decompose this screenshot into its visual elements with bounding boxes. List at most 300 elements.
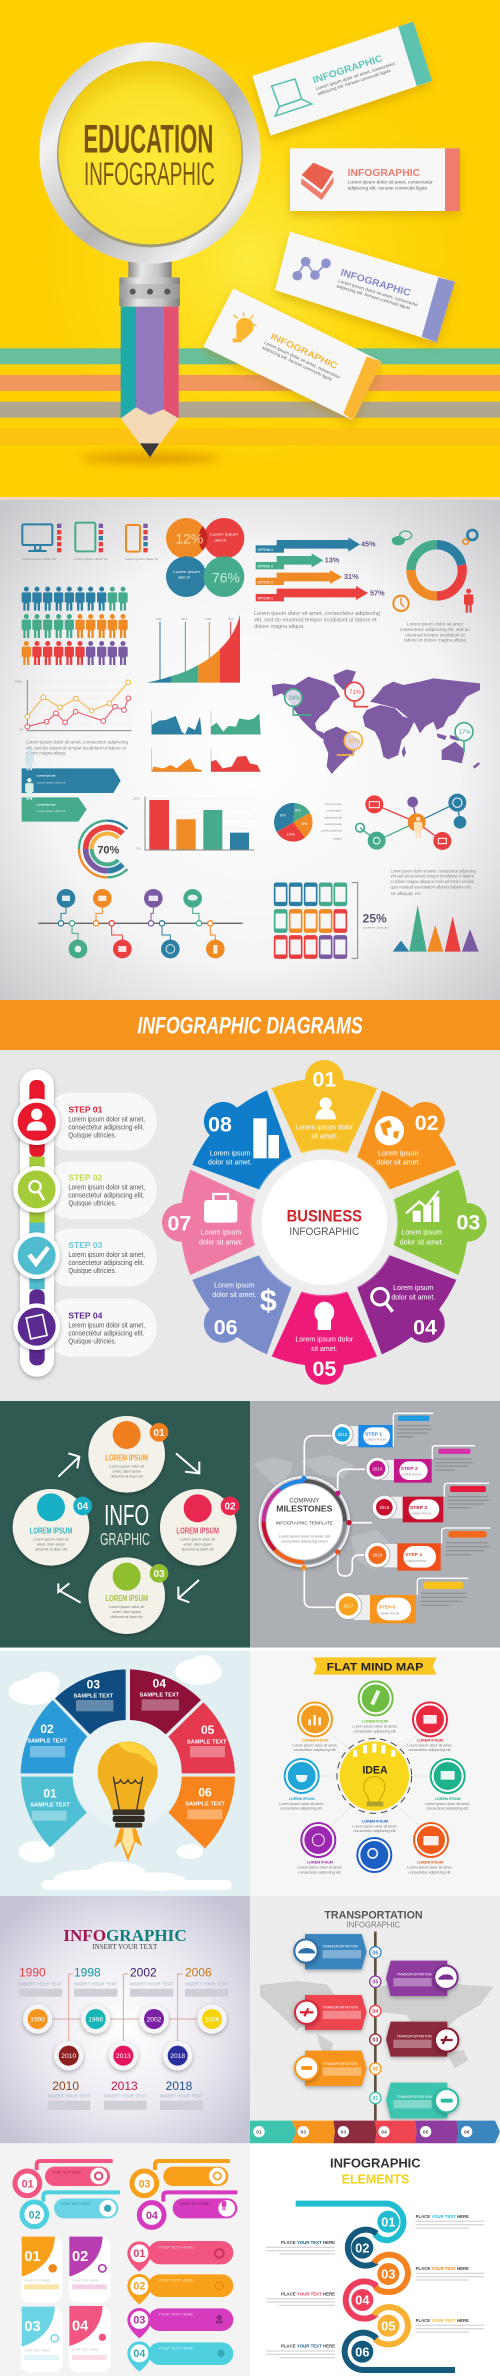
s-curve rings <box>296 2204 455 2370</box>
pin list: YOUR TEXT HERE <box>158 2312 194 2317</box>
milestone row 2016: STEP 4 <box>405 1552 422 1558</box>
corner cards <box>21 2237 111 2372</box>
card: graph <box>275 232 455 342</box>
panel: light bulb rocket arc: SAMPLE TEXT <box>30 1803 70 1809</box>
banner title: FLAT MIND MAP <box>327 1662 424 1674</box>
satellite captions: Lorem ipsum dolor sit amet, <box>407 1866 453 1870</box>
panel: hand-drawn info graphic: amet, diam quam <box>113 1470 141 1474</box>
panel: hand-drawn info graphic: LOREM IPSUM <box>105 1453 148 1463</box>
pin list: 04 <box>133 2348 145 2360</box>
wheel numbers: 07 <box>167 1212 191 1236</box>
panel: timeline 1990 to 2018: 2002 <box>147 2016 162 2023</box>
milestone row 2014 <box>366 1446 475 1483</box>
growth curve chart: 64% <box>205 617 212 621</box>
satellite captions: LOREM IPSUM <box>417 1738 443 1742</box>
card: light bulb: Lorem ipsum dolor sit amet, consectetur <box>263 340 342 380</box>
panel: hand-drawn info graphic: dictumst at diam elit <box>111 1475 143 1479</box>
bottom arrow strip <box>250 2121 500 2143</box>
wheel icons: $ <box>260 1284 277 1318</box>
pin list: YOUR TEXT HERE <box>158 2245 194 2250</box>
card: laptop: INFOGRAPHIC <box>312 53 384 86</box>
chart: eight-segment wheel <box>162 1060 487 1385</box>
satellite captions: LOREM IPSUM <box>289 1797 315 1801</box>
pie chart <box>274 802 343 842</box>
panel: hand-drawn info graphic: amet, diam quam <box>37 1542 65 1546</box>
milestone row 2015 <box>372 1483 489 1522</box>
option arrows: OPTION 2 <box>257 580 273 584</box>
panel: timeline 1990 to 2018: INSERT YOUR TEXT <box>74 1981 117 1986</box>
title: info graphic: GRAPHIC <box>100 1529 150 1549</box>
corner cards: 04 <box>72 2318 89 2334</box>
card: graph: adipiscing elit. Aenean commodo ligula <box>336 283 411 311</box>
pin list: 02 <box>133 2281 145 2293</box>
panel: timeline 1990 to 2018: 2006 <box>205 2016 220 2023</box>
panel: step list <box>13 1069 157 1377</box>
section: infographic elements sheet: eiusmod tempor incididunt ut <box>405 632 465 637</box>
card: laptop: Lorem ipsum dolor sit amet, consectetur <box>315 61 396 91</box>
panel: infographic elements: 02 <box>355 2241 369 2255</box>
section: four panel row one and two <box>0 1401 500 1897</box>
pie chart: Lorem ipsum <box>325 822 343 826</box>
step text: consectetur adipiscing elit. <box>68 1258 144 1267</box>
corner cards: YOUR TEXT HERE <box>24 2348 50 2352</box>
panel: infographic elements: 05 <box>381 2319 395 2333</box>
milestone row 2014: STEP 2 <box>401 1466 418 1472</box>
panel: timeline 1990 to 2018: INSERT YOUR TEXT <box>185 1981 228 1986</box>
section: education infographic hero <box>0 0 500 499</box>
panel: infographic elements: 03 <box>381 2268 395 2282</box>
step text <box>68 1104 145 1345</box>
section: four panel row three and four <box>0 1896 500 2376</box>
wheel captions: dolor sit amet. <box>212 1292 256 1299</box>
bottom arrow strip: 05 <box>423 2130 429 2136</box>
option arrows: 45% <box>361 540 376 549</box>
panel: hand-drawn info graphic: amet, diam quam <box>184 1542 212 1546</box>
pin list: 03 <box>133 2315 145 2327</box>
card: book: INFOGRAPHIC <box>348 168 420 179</box>
milestone row 2016: LOREM IPSUM <box>405 1559 426 1563</box>
milestones title: MILESTONES <box>276 1503 333 1513</box>
card: laptop: adipiscing elit. Aenean commodo ligula <box>317 68 392 96</box>
wheel numbers: 06 <box>214 1315 238 1339</box>
panel: hand-drawn info graphic: Lorem ipsum dolor sit <box>180 1537 215 1541</box>
panel: timeline 1990 to 2018: 2010 <box>61 2053 76 2060</box>
option arrows: 31% <box>344 572 359 581</box>
panel: infographic elements: 04 <box>355 2294 369 2308</box>
text block: Lorem ipsum dolor sit amet, consectetur adipiscing <box>391 868 476 873</box>
milestone row 2017: LOREM IPSUM <box>378 1612 400 1616</box>
text block <box>391 868 476 896</box>
wheel captions: Lorem ipsum <box>210 1150 250 1157</box>
step text: Quisque ultricies. <box>68 1130 116 1139</box>
step icons <box>26 1109 50 1339</box>
panel: timeline 1990 to 2018: INSERT YOUR TEXT <box>104 2093 147 2098</box>
pie chart: 9% <box>295 807 301 812</box>
step text: Lorem ipsum dolor sit amet, <box>68 1320 145 1329</box>
panel: transportation infographic: TRANSPORTATION <box>323 2004 358 2009</box>
wheel captions: Lorem ipsum <box>378 1150 419 1157</box>
line chart <box>15 680 132 756</box>
step text: Quisque ultricies. <box>68 1198 116 1207</box>
transport icon badges <box>294 1939 458 2112</box>
satellite captions: consectetur adipiscing elit. <box>280 1807 323 1811</box>
step circles <box>13 1098 60 1350</box>
wheel captions: dolor sit amet. <box>376 1160 420 1167</box>
panel: light bulb rocket arc: 03 <box>87 1677 100 1691</box>
element captions: PLACE YOUR TEXT HERE <box>281 2240 335 2245</box>
card: laptop <box>252 22 432 136</box>
number nodes <box>370 1947 381 2104</box>
wheel captions: dolor sit amet. <box>208 1160 252 1167</box>
panel: numbered labels collection <box>0 2143 250 2376</box>
line chart: 100% <box>15 680 23 684</box>
panel: flat mind map <box>250 1651 500 1897</box>
satellite captions: Lorem ipsum dolor sit amet, <box>352 1824 398 1828</box>
text block: dolore magna aliqua. <box>254 624 305 630</box>
world map: 17% <box>459 730 471 736</box>
triangle chart <box>393 905 479 952</box>
title: education infographic: EDUCATION <box>83 118 213 162</box>
satellite captions: consectetur adipiscing elit. <box>354 1829 396 1833</box>
pill row 03: 03 <box>139 2178 151 2190</box>
pill row 01: 01 <box>22 2178 34 2190</box>
satellite captions: Lorem ipsum dolor sit amet, <box>279 1802 324 1806</box>
text block <box>254 611 380 630</box>
clouds <box>8 1655 232 1891</box>
title: education infographic <box>83 118 215 192</box>
element captions: PLACE YOUR TEXT HERE <box>281 2344 335 2349</box>
milestone row 2013: STEP 1 <box>365 1432 382 1438</box>
text block: elit sed do eiusmod tempor incididunt ut labore <box>391 874 475 879</box>
panel: infographic elements: 06 <box>355 2345 369 2359</box>
panel: light bulb rocket arc: SAMPLE TEXT <box>185 1802 225 1808</box>
pill row 01: YOUR TEXT HERE <box>52 2170 82 2174</box>
icon: rocket light bulb <box>98 1742 158 1862</box>
satellite captions: LOREM IPSUM <box>435 1797 461 1801</box>
panel: timeline 1990 to 2018: 2006 <box>185 1966 212 1980</box>
panel: timeline 1990 to 2018: 2010 <box>52 2079 79 2093</box>
wheel center label <box>287 1207 362 1238</box>
satellite captions: consectetur adipiscing elit. <box>409 1870 451 1874</box>
elements title: INFOGRAPHIC <box>330 2155 421 2170</box>
bar chart <box>132 796 254 850</box>
panel: timeline 1990 to 2018: 2018 <box>166 2079 193 2093</box>
satellite captions: consectetur adipiscing elit. <box>426 1807 469 1811</box>
panel: hand-drawn info graphic: Lorem ipsum dolor sit <box>109 1465 144 1469</box>
donut chart <box>392 530 477 613</box>
arrow tabs: Lorem ipsum dolor sit <box>37 780 65 784</box>
percent circles: 12% <box>175 531 203 547</box>
panel: transportation infographic: 05 <box>372 1980 378 1986</box>
pin list: 01 <box>133 2248 145 2260</box>
milestones title: Lorem ipsum dolor sit amet, elit <box>279 1535 330 1539</box>
panel: company milestones <box>250 1401 500 1648</box>
step text: consectetur adipiscing elit. <box>68 1190 144 1199</box>
panel: light bulb rocket arc: 01 <box>43 1786 57 1800</box>
pie chart: 8% <box>280 813 286 818</box>
timeline title: INFOGRAPHIC <box>63 1926 187 1945</box>
bottom arrow strip: 06 <box>464 2130 470 2136</box>
card: book: adipiscing elit. Aenean commodo ligula <box>348 186 428 191</box>
panel: light bulb rocket arc: 06 <box>198 1786 212 1800</box>
wheel captions: Lorem ipsum dolor <box>295 1337 354 1344</box>
radial progress 70 percent: 70% <box>97 844 120 856</box>
pie chart: Lorem ipsum <box>325 802 343 806</box>
wheel captions: Lorem ipsum <box>401 1230 442 1237</box>
card: book: Lorem ipsum dolor sit amet, consectetur <box>348 180 433 185</box>
percent circles: Lorem ipsum <box>173 570 200 574</box>
wheel captions: sit amet. <box>311 1346 338 1353</box>
element captions: PLACE YOUR TEXT HERE <box>416 2214 469 2219</box>
wheel captions <box>199 1124 444 1353</box>
arrow tabs <box>22 749 121 822</box>
step text: Quisque ultricies. <box>68 1336 116 1345</box>
panel: timeline 1990 to 2018: 2013 <box>111 2079 138 2093</box>
central idea circle <box>337 1739 412 1813</box>
world map: 24% <box>288 696 301 702</box>
step text: STEP 02 <box>68 1173 103 1183</box>
panel: timeline 1990 to 2018: 2018 <box>170 2053 185 2060</box>
wheel captions: dolor sit amet. <box>391 1295 435 1302</box>
pie chart: adipiscing elit <box>324 815 342 819</box>
transportation title <box>324 1909 423 1929</box>
arrows <box>58 1453 199 1603</box>
card: graph: INFOGRAPHIC <box>339 267 412 299</box>
wheel numbers: 05 <box>312 1357 336 1381</box>
milestone row 2015: STEP 3 <box>410 1505 427 1511</box>
milestones title <box>276 1499 333 1544</box>
milestone row 2015: 2015 <box>380 1505 390 1510</box>
text block: quis nostrud exercitation ullamco laboris nisi <box>391 884 471 889</box>
panel: timeline 1990 to 2018: 1990 <box>19 1966 46 1980</box>
panel: hand-drawn info graphic: dictumst at diam elit <box>111 1615 143 1619</box>
card: light bulb: INFOGRAPHIC <box>269 331 340 371</box>
panel: timeline 1990 to 2018: 1998 <box>74 1966 101 1980</box>
panel: transportation infographic: 06 <box>372 1950 378 1956</box>
text block: ut aliquip ex <box>391 891 422 896</box>
pie chart: 8% <box>302 821 308 826</box>
panel: infographic elements <box>250 2143 500 2376</box>
satellite captions: LOREM IPSUM <box>302 1738 328 1742</box>
panel: light bulb rocket arc: 04 <box>153 1677 166 1691</box>
step text: Quisque ultricies. <box>68 1266 116 1275</box>
milestone row 2013: LOREM IPSUM <box>365 1438 386 1442</box>
percent circles: Lorem ipsum <box>210 533 238 537</box>
phone grid <box>275 883 389 958</box>
network diagram <box>356 794 466 850</box>
corner cards: YOUR TEXT HERE <box>72 2348 98 2352</box>
panel: hand-drawn info graphic: 04 <box>77 1502 89 1513</box>
card: graph: Lorem ipsum dolor sit amet, consectetur <box>338 278 419 308</box>
step text: Lorem ipsum dolor sit amet, <box>68 1182 145 1191</box>
panel: hand-drawn info graphic: LOREM IPSUM <box>176 1525 219 1535</box>
panel: timeline 1990 to 2018: 2013 <box>116 2053 131 2060</box>
wheel captions: dolor sit amet. <box>400 1240 444 1247</box>
satellite captions: consectetur adipiscing elit. <box>294 1748 336 1752</box>
step text: STEP 04 <box>68 1311 103 1321</box>
wheel numbers: 08 <box>208 1112 232 1136</box>
text block: et dolore magna aliqua ut enim ad minim veniam <box>391 879 474 884</box>
milestone row 2013 <box>332 1413 433 1447</box>
pill row 04: YOUR TEXT HERE <box>179 2202 209 2206</box>
coloured stripes <box>0 348 500 445</box>
satellite captions: Lorem ipsum dolor sit amet, <box>407 1743 453 1747</box>
pill row 01 <box>15 2161 113 2196</box>
satellite captions: LOREM IPSUM <box>362 1720 388 1724</box>
bottom arrow strip: 04 <box>381 2130 387 2136</box>
milestone row 2016: 2016 <box>373 1553 383 1558</box>
panel: hand-drawn info graphic: Lorem ipsum dolor sit <box>109 1605 144 1609</box>
step text: consectetur adipiscing elit. <box>68 1328 144 1337</box>
satellite captions: Lorem ipsum dolor sit amet, <box>297 1866 343 1870</box>
arrow tabs: Lorem ipsum <box>37 774 56 778</box>
wheel numbers <box>167 1068 480 1381</box>
milestone row 2017 <box>335 1578 468 1623</box>
corner cards: 03 <box>24 2319 41 2335</box>
step text: Lorem ipsum dolor sit amet, <box>68 1250 145 1259</box>
panel: transportation infographic: TRANSPORTATION <box>397 1972 432 1977</box>
growth curve chart: 71% <box>227 617 234 621</box>
pin list <box>127 2241 233 2372</box>
milestone row 2017: 2017 <box>344 1604 354 1609</box>
panel: light bulb rocket arc: SAMPLE TEXT <box>187 1739 227 1745</box>
panel: transportation infographic: 01 <box>372 2096 378 2102</box>
satellite captions: consectetur adipiscing elit. <box>409 1748 451 1752</box>
arc segments <box>21 1669 235 1848</box>
panel: light bulb rocket arc <box>0 1651 250 1897</box>
people pictogram <box>22 587 128 665</box>
section: infographic diagrams header and wheel <box>0 1000 500 1403</box>
phone grid: 25% <box>363 912 387 926</box>
percent circles: dolor sit <box>215 538 226 542</box>
wheel captions: sit amet. <box>311 1134 338 1141</box>
panel: transportation infographic: 04 <box>372 2009 378 2015</box>
wheel center label: BUSINESS <box>287 1207 362 1226</box>
title: education infographic: INFOGRAPHIC <box>84 155 215 192</box>
elements title: ELEMENTS <box>342 2172 409 2186</box>
panel: light bulb rocket arc: SAMPLE TEXT <box>74 1694 114 1700</box>
timeline title: INSERT YOUR TEXT <box>92 1942 158 1951</box>
world map: 71% <box>349 690 362 696</box>
bar chart: 100% <box>132 796 140 800</box>
transport arrows <box>305 1934 447 2118</box>
milestone row 2016 <box>365 1528 491 1571</box>
card: light bulb: adipiscing elit. Aenean commodo ligula <box>261 345 333 382</box>
panel: timeline 1990 to 2018 <box>0 1896 250 2143</box>
section: infographic elements sheet: labore et dolore magna aliqua <box>404 638 466 643</box>
bottom arrow strip: 03 <box>341 2130 346 2136</box>
growth curve chart <box>147 615 240 683</box>
wheel numbers: 04 <box>413 1315 437 1339</box>
panel: transportation infographic: TRANSPORTATION <box>397 2094 432 2099</box>
line chart: Lorem ipsum dolor sit amet, consectetur adipiscing <box>26 740 128 745</box>
bottom arrow strip: 01 <box>256 2130 262 2136</box>
panel: infographic elements: 01 <box>381 2215 395 2229</box>
pill row 02: 02 <box>29 2209 41 2221</box>
pill row 04 <box>139 2192 237 2227</box>
panel: transportation infographic <box>250 1896 500 2143</box>
device icons <box>22 523 148 552</box>
element captions <box>281 2214 469 2349</box>
wheel captions: Lorem ipsum <box>214 1282 255 1289</box>
wheel numbers: 01 <box>312 1068 336 1092</box>
panel: light bulb rocket arc: SAMPLE TEXT <box>27 1738 67 1744</box>
element captions: PLACE YOUR TEXT HERE <box>416 2318 469 2323</box>
panel: light bulb rocket arc: 05 <box>201 1723 215 1737</box>
panel: timeline 1990 to 2018: INSERT YOUR TEXT <box>160 2093 203 2098</box>
pill row 02: YOUR TEXT HERE <box>61 2202 91 2206</box>
line chart: elit, sed do eiusmod tempor incididunt ut labore et <box>26 745 127 750</box>
panel: timeline 1990 to 2018: INSERT YOUR TEXT <box>130 1981 173 1986</box>
line chart: 0% <box>19 728 24 732</box>
panel: hand-drawn info graphic <box>0 1401 250 1648</box>
title: info graphic: INFO <box>104 1500 149 1532</box>
satellite captions: LOREM IPSUM <box>417 1861 443 1865</box>
bottom arrow strip: 02 <box>301 2130 306 2136</box>
panel: timeline 1990 to 2018: 1998 <box>88 2016 103 2023</box>
pill row 03 <box>132 2161 230 2196</box>
map markers <box>285 682 473 755</box>
element captions: PLACE YOUR TEXT HERE <box>281 2291 335 2296</box>
panel: hand-drawn info graphic: amet, diam quam <box>113 1610 141 1614</box>
text block: Lorem ipsum dolor sit amet, consectetur adipiscing <box>254 611 380 617</box>
elements title <box>330 2155 421 2186</box>
transportation title: INFOGRAPHIC <box>347 1920 400 1929</box>
small area charts <box>152 711 261 772</box>
panel: transportation infographic: 02 <box>372 2067 378 2073</box>
satellite captions: Lorem ipsum dolor sit amet, <box>292 1743 338 1747</box>
panel: hand-drawn info graphic: dictumst at diam elit <box>35 1547 67 1551</box>
pill row 02 <box>22 2192 120 2227</box>
panel: hand-drawn info graphic: Lorem ipsum dolor sit <box>34 1537 68 1541</box>
panel: light bulb rocket arc: SAMPLE TEXT <box>140 1693 180 1699</box>
step text: consectetur adipiscing elit. <box>68 1122 144 1131</box>
year circles <box>23 2004 227 2070</box>
option arrows: 57% <box>370 588 385 597</box>
satellite icons <box>283 1680 466 1873</box>
arrow tabs: Lorem ipsum dolor sit <box>37 809 65 813</box>
percent circles <box>166 518 244 597</box>
corner cards: 01 <box>24 2249 41 2265</box>
line chart: dolore magna aliqua. <box>26 751 67 756</box>
panel: transportation infographic: TRANSPORTATION <box>323 2061 358 2066</box>
panel: hand-drawn info graphic: 01 <box>153 1428 165 1439</box>
title: info graphic <box>100 1500 150 1549</box>
wheel numbers: 03 <box>456 1210 480 1234</box>
title bar <box>0 1000 500 1050</box>
step text: Lorem ipsum dolor sit amet, <box>68 1114 145 1123</box>
milestones title: COMPANY <box>289 1499 319 1505</box>
corner cards: YOUR TEXT HERE <box>72 2279 98 2283</box>
satellite captions: consectetur adipiscing elit. <box>354 1729 396 1733</box>
world map: 32% <box>348 739 361 745</box>
option arrows: OPTION 3 <box>257 565 273 569</box>
panel: light bulb rocket arc: 02 <box>40 1722 54 1736</box>
icons around donut <box>392 530 477 613</box>
option arrows: OPTION 4 <box>257 548 273 552</box>
panel: timeline 1990 to 2018: 1990 <box>30 2016 45 2023</box>
milestones title: consectetur adipiscing lorem <box>281 1540 328 1544</box>
title bar: INFOGRAPHIC DIAGRAMS <box>137 1012 363 1039</box>
section: infographic elements sheet: Lorem ipsum dolor sit <box>74 557 108 561</box>
panel: hand-drawn info graphic: dictumst at diam elit <box>182 1547 214 1551</box>
satellite captions: Lorem ipsum dolor sit amet, <box>425 1802 470 1806</box>
pie chart: 16% <box>287 832 295 837</box>
option arrows: 13% <box>325 556 340 565</box>
panel: timeline 1990 to 2018: INSERT YOUR TEXT <box>19 1981 62 1986</box>
option arrows <box>256 537 385 601</box>
panel: hand-drawn info graphic: LOREM IPSUM <box>105 1593 148 1603</box>
